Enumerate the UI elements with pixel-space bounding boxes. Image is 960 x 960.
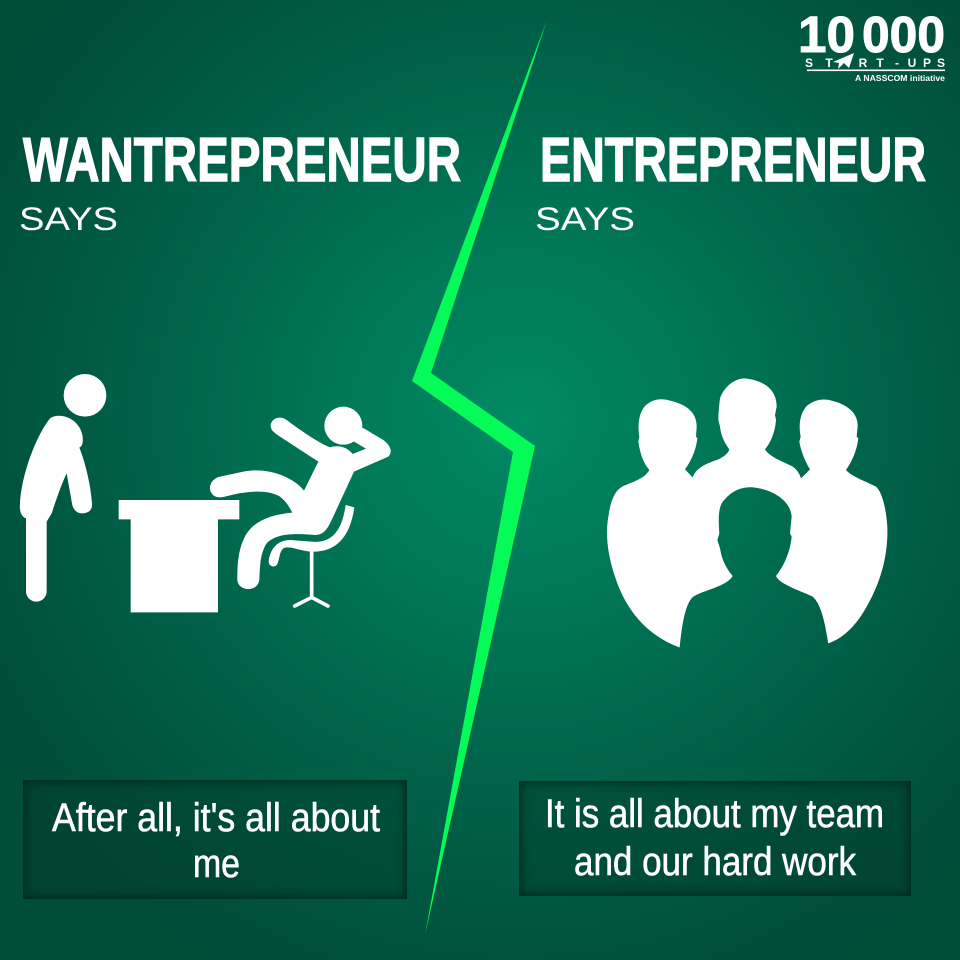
text: says right: SAYS xyxy=(535,201,635,237)
logo: 10000 start-ups: STRT-UPS xyxy=(805,56,945,70)
icon: team silhouettes xyxy=(607,378,887,647)
quote text: my team: and our hard work xyxy=(574,840,857,884)
quote text: my team: It is all about my team xyxy=(545,792,884,836)
lightning divider xyxy=(412,20,547,935)
quote text: after all: After all, it's all about xyxy=(52,796,380,840)
icon: standing man, desk and reclining boss xyxy=(20,374,391,612)
text: says left: SAYS xyxy=(19,201,118,237)
panel: right quote box xyxy=(519,781,911,896)
quote text: after all xyxy=(52,796,380,886)
heading: wantrepreneur: WANTREPRENEUR xyxy=(23,126,461,195)
logo: 10000 start-ups xyxy=(798,6,946,83)
panel: left quote box xyxy=(23,780,407,899)
logo: 10000 start-ups: A NASSCOM initiative xyxy=(855,74,946,83)
logo: 10000 start-ups: 10 xyxy=(798,6,855,63)
quote text: my team xyxy=(545,792,884,884)
quote text: after all: me xyxy=(193,842,240,886)
logo: 10000 start-ups: 000 xyxy=(862,6,945,63)
